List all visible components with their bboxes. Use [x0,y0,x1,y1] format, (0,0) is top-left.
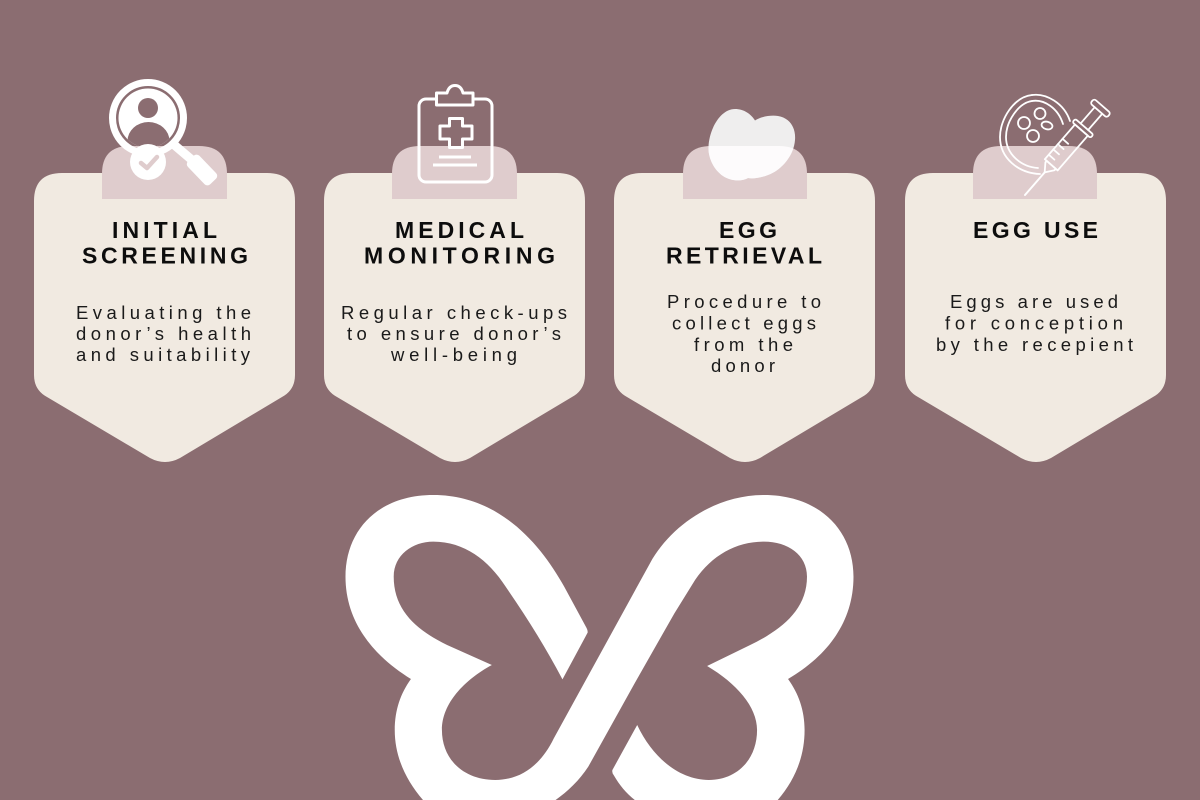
heading [82,217,248,268]
heading [666,217,822,268]
description: and suitability [76,344,251,365]
heading: INITIAL [112,217,217,243]
description: by the recepient [936,334,1133,355]
description: to ensure donor’s [347,323,561,344]
heading: MONITORING [364,242,555,268]
tab [102,146,227,199]
description [936,291,1133,355]
tab [392,146,517,199]
description [667,291,821,376]
description: Procedure to [667,291,821,312]
heading: EGG [719,217,777,243]
description: well-being [390,344,517,365]
description: donor [711,355,775,376]
description: Eggs are used [950,291,1118,312]
description [341,302,567,365]
tab [683,146,807,199]
description: collect eggs [672,312,816,334]
description: from the [694,334,793,355]
panel: egg retrieval [614,109,875,462]
card shape [614,173,875,462]
description: Regular check-ups [341,302,567,323]
description: donor’s health [76,323,251,344]
tab [973,146,1097,199]
icon: magnifying glass with person [112,82,219,187]
description: for conception [945,312,1123,334]
description [76,302,251,365]
heading: SCREENING [82,242,248,268]
icon: egg and syringe [1000,95,1111,203]
card shape [905,173,1166,462]
panel: initial screening [34,82,295,462]
panel: egg use [905,95,1166,462]
card shape [34,173,295,462]
panel: medical monitoring [324,86,585,462]
card shape [324,173,585,462]
icon: clipboard with cross [419,86,492,182]
heading [364,217,555,268]
logo: white butterfly [345,495,853,800]
icon: egg cells [708,109,795,180]
heading: EGG USE [973,217,1098,243]
heading: MEDICAL [395,217,524,243]
heading: RETRIEVAL [666,242,822,268]
description: Evaluating the [76,302,251,323]
